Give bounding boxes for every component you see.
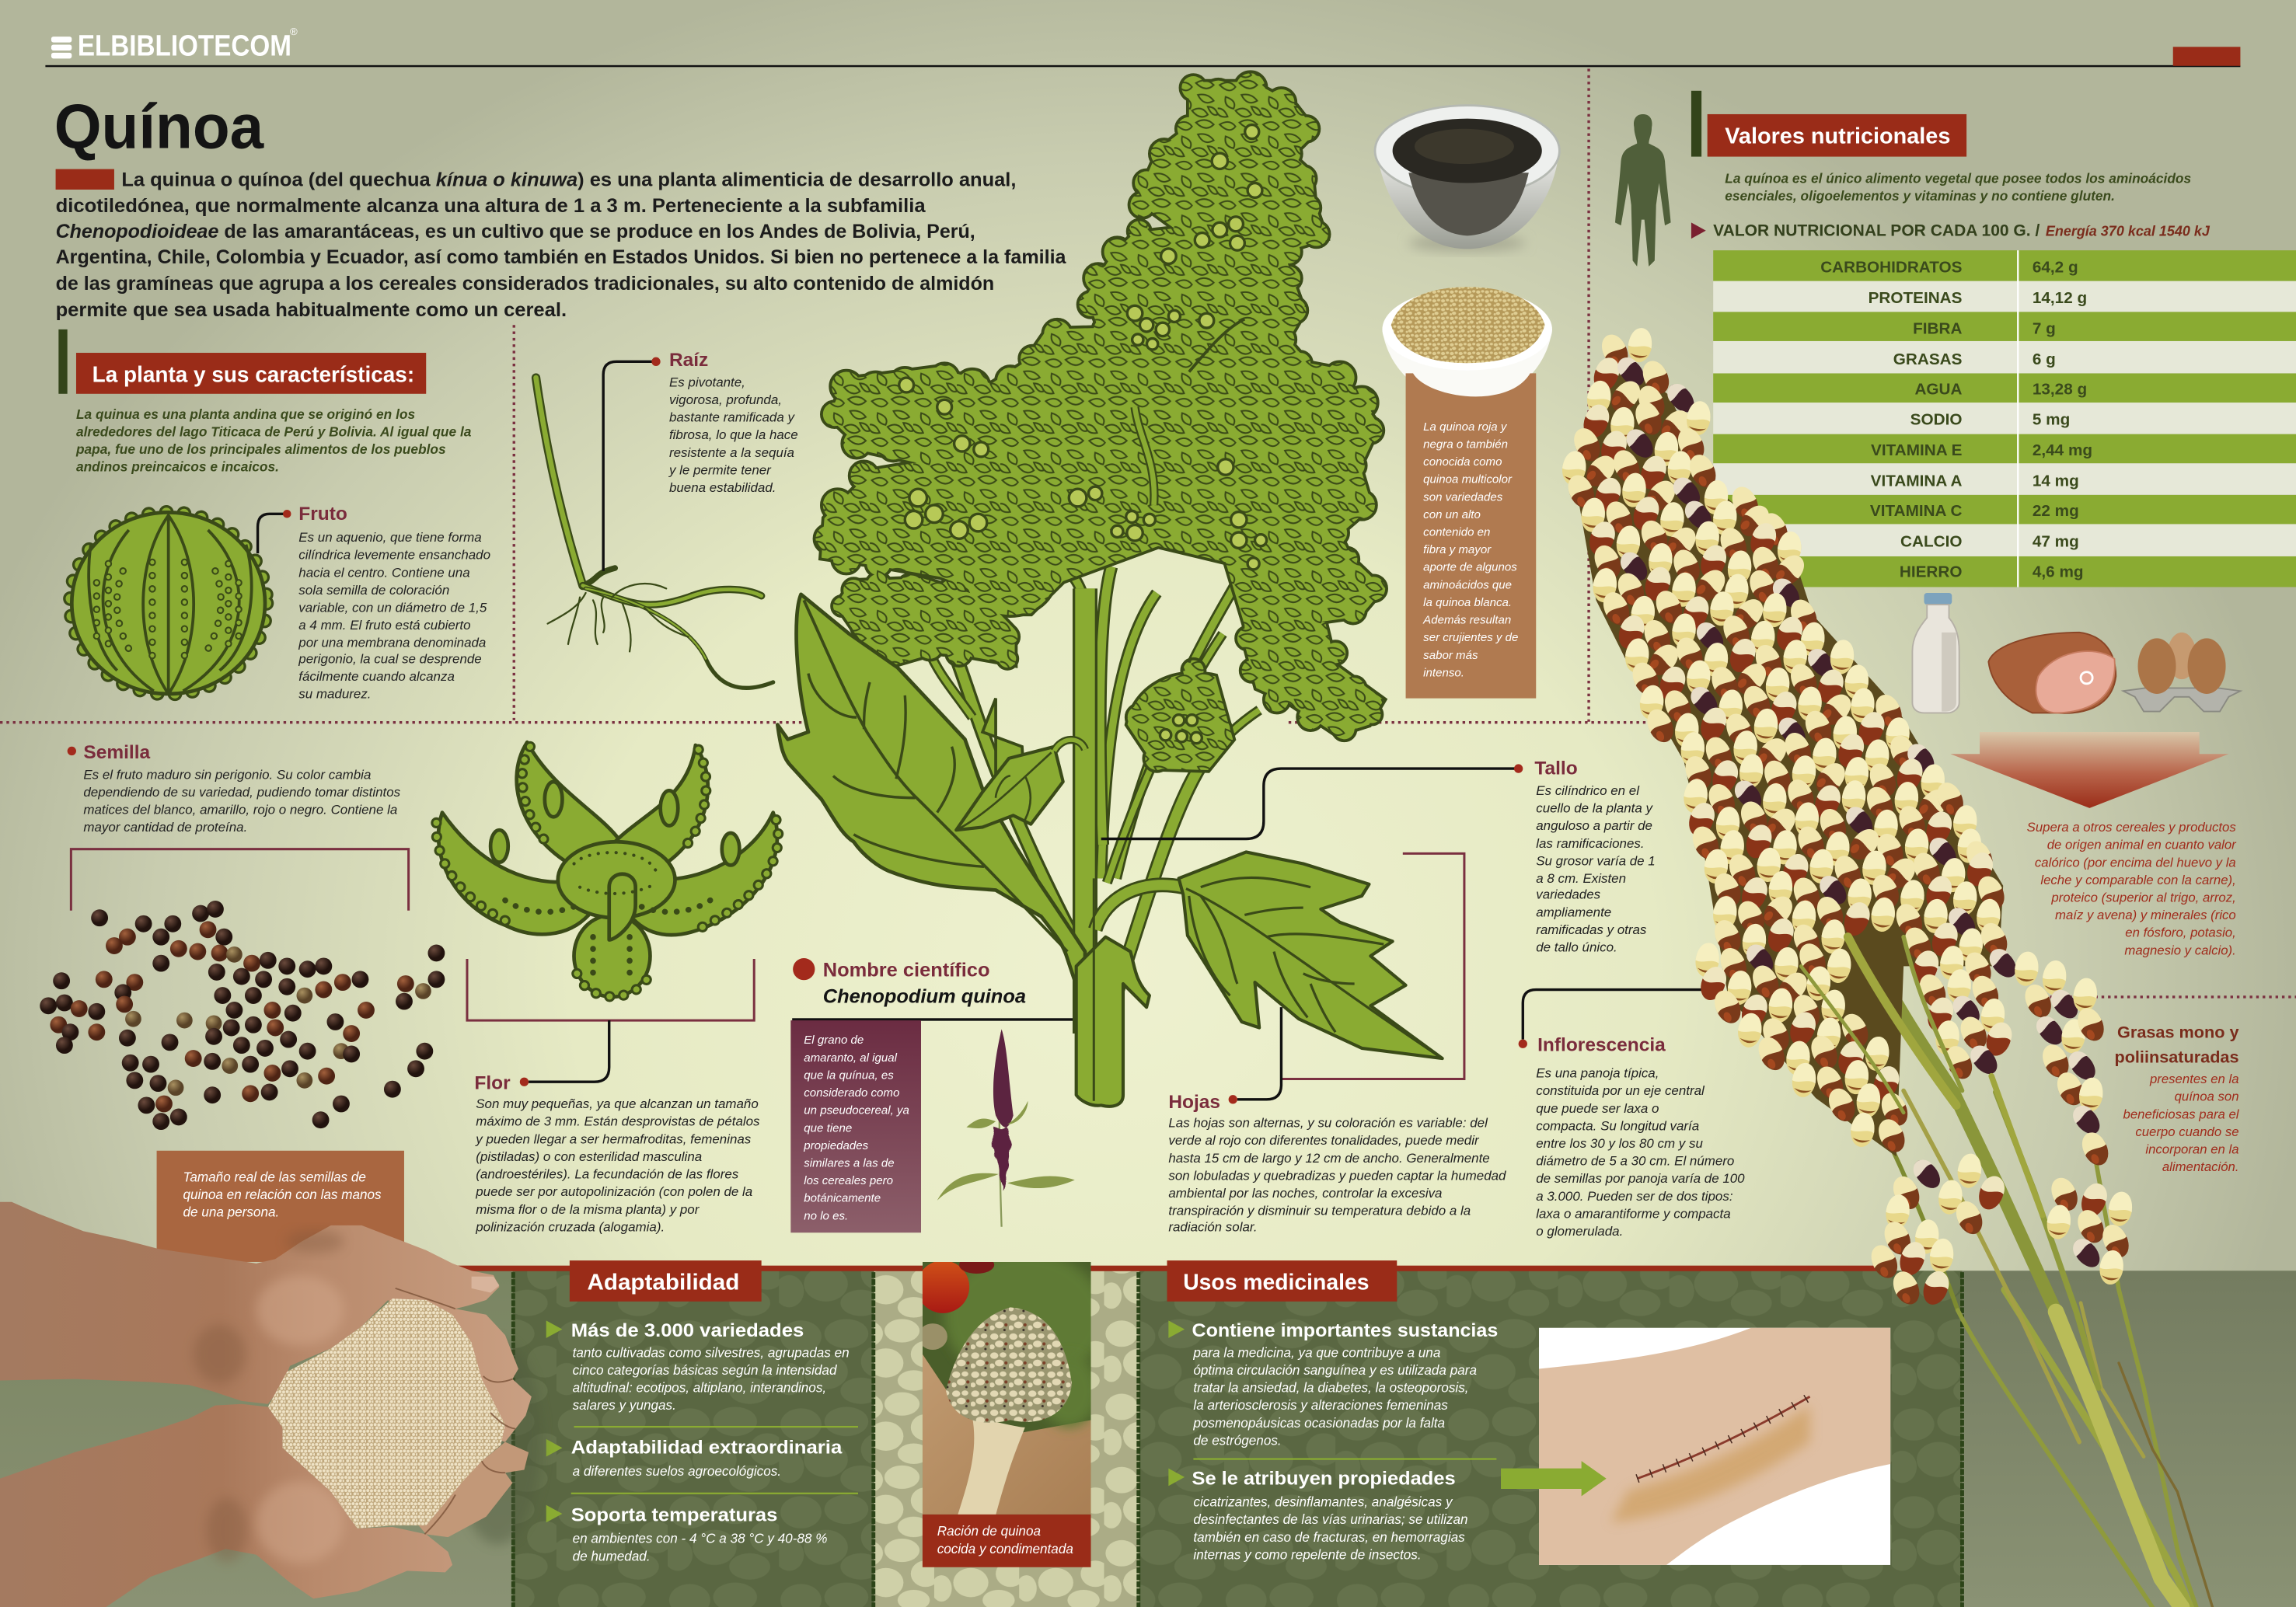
- food caption: cocida y condimentada: [937, 1541, 1073, 1556]
- nutrition table: VITAMINA E: [1871, 441, 1963, 459]
- inflorescencia label: compacta. Su longitud varía: [1536, 1118, 1699, 1133]
- panel: nombre cientifico: amaranto, al igual: [804, 1051, 898, 1065]
- dotted dividers: [0, 69, 2296, 997]
- panicle stems: [1757, 932, 2213, 1607]
- hojas bracket: [1281, 853, 1464, 1079]
- panel: bottom band left: [0, 1271, 512, 1607]
- tallo label: [1514, 758, 1656, 955]
- panel: usos medicinales: de estrógenos.: [1193, 1432, 1282, 1448]
- table heading: [1691, 221, 2210, 239]
- panel: adaptabilidad: Más de 3.000 variedades: [571, 1321, 804, 1341]
- header rule and red tab: [45, 47, 2240, 67]
- raíz label: vigorosa, profunda,: [669, 392, 782, 407]
- fruto label: [258, 504, 490, 702]
- panel: usos medicinales: óptima circulación sanguínea y es utilizada para: [1193, 1362, 1477, 1378]
- flor label: [474, 1020, 760, 1234]
- fruto label: cilíndrica levemente ensanchado: [298, 548, 490, 563]
- hojas label: Hojas: [1168, 1092, 1220, 1113]
- icon: flor illustration: [436, 742, 778, 997]
- panel: usos medicinales: también en caso de fracturas, en hemorragias: [1193, 1529, 1465, 1545]
- fruto label: Fruto: [298, 504, 347, 525]
- hojas label: verde al rojo con diferentes tonalidades, puede medir: [1168, 1133, 1480, 1148]
- comparison text: proteico (superior al trigo, arroz,: [2050, 891, 2236, 905]
- inflorescencia label: de semillas por panoja varía de 100: [1536, 1171, 1745, 1186]
- nutrition table: 14 mg: [2033, 472, 2079, 490]
- panel: nombre cientifico: Nombre científico: [823, 960, 989, 981]
- orange info box: con un alto: [1423, 508, 1481, 521]
- raíz label: Es pivotante,: [669, 375, 745, 389]
- panel: adaptabilidad: Adaptabilidad extraordinaria: [571, 1438, 843, 1459]
- nutrition table: SODIO: [1910, 410, 1962, 428]
- nutrition table: HIERRO: [1900, 563, 1962, 580]
- icon: amaranto plant: [937, 1029, 1075, 1227]
- flor label: polinización cruzada (alogamia).: [475, 1219, 665, 1234]
- comparison text: leche y comparable con la carne),: [2040, 873, 2236, 887]
- hojas label: transpiración y disminuir su temperatura debido a la: [1168, 1204, 1471, 1218]
- orange info box: quinoa multicolor: [1423, 473, 1513, 486]
- panel: valores nutricionales header: [1691, 91, 1966, 157]
- food photo: [922, 1262, 1091, 1515]
- la planta intro: andinos preincaicos e incaicos.: [76, 459, 279, 475]
- plant inner stems: [1135, 319, 1244, 505]
- icon: ham: [1988, 633, 2116, 713]
- fruto label: por una membrana denominada: [298, 636, 486, 650]
- nutrition table: 22 mg: [2033, 502, 2079, 520]
- orange info box: Además resultan: [1422, 614, 1511, 627]
- inflorescencia label: diámetro de 5 a 30 cm. El número: [1536, 1154, 1734, 1169]
- semilla label: dependiendo de su variedad, pudiendo tomar distintos: [83, 785, 401, 800]
- icon: fruto illustration: [70, 512, 267, 694]
- hands photo: [0, 1202, 542, 1607]
- inflorescencia label: [1519, 990, 1745, 1239]
- orange info box: intenso.: [1423, 666, 1464, 679]
- grasas text: poliinsaturadas: [2114, 1048, 2239, 1067]
- intro text: de las gramíneas que agrupa a los cereales considerados tradicionales, su alto contenido de almidón: [56, 273, 994, 295]
- inflorescencia label: Inflorescencia: [1537, 1035, 1666, 1056]
- hojas label: radiación solar.: [1168, 1219, 1258, 1234]
- nutrition table: 14,12 g: [2033, 289, 2087, 307]
- panel: adaptabilidad: tanto cultivadas como silvestres, agrupadas en: [573, 1344, 850, 1360]
- table heading: VALOR NUTRICIONAL POR CADA 100 G. /: [1713, 221, 2040, 239]
- icon: raíz illustration: [536, 378, 773, 688]
- nutrition table: PROTEINAS: [1869, 289, 1963, 307]
- semilla label: Es el fruto maduro sin perigonio. Su color cambia: [83, 767, 371, 782]
- raíz label: bastante ramificada y: [669, 410, 795, 425]
- grasas text: alimentación.: [2162, 1159, 2239, 1174]
- grasas text: [2114, 1023, 2240, 1174]
- hojas label: hasta 15 cm de largo y 12 cm de ancho. Generalmente: [1168, 1151, 1490, 1166]
- intro text: Argentina, Chile, Colombia y Ecuador, así como también en Estados Unidos. Si bien no pertenece a la familia: [56, 246, 1066, 268]
- nutrition table: GRASAS: [1893, 350, 1963, 368]
- nutrition table: 4,6 mg: [2033, 563, 2084, 580]
- panel: adaptabilidad: en ambientes con - 4 °C a 38 °C y 40-88 %: [573, 1531, 827, 1546]
- tallo label: las ramificaciones.: [1536, 836, 1645, 851]
- tallo label: a 8 cm. Existen: [1536, 871, 1626, 886]
- panel: adaptabilidad: Adaptabilidad: [587, 1270, 739, 1295]
- panel: nombre cientifico: no lo es.: [804, 1209, 848, 1222]
- panel: food column background: [874, 1271, 1139, 1607]
- orange info box: [1406, 373, 1536, 699]
- semilla bracket: [71, 849, 409, 911]
- nutrition table: 6 g: [2033, 350, 2056, 368]
- intro text: [56, 169, 1066, 321]
- plant panicle clusters: [815, 73, 1385, 770]
- nutrition table: VITAMINA C: [1870, 502, 1963, 520]
- valores intro: esenciales, oligoelementos y vitaminas y no contiene gluten.: [1725, 188, 2115, 204]
- orange info box: fibra y mayor: [1423, 543, 1492, 556]
- nutrition table: 2,44 mg: [2033, 441, 2092, 459]
- seeds caption box: quinoa en relación con las manos: [183, 1187, 382, 1202]
- tallo label: ramificadas y otras: [1536, 922, 1647, 937]
- grasas text: Grasas mono y: [2117, 1023, 2239, 1042]
- semilla label: [68, 742, 401, 835]
- hojas label: Las hojas son alternas, y su coloración es variable: del: [1168, 1116, 1488, 1131]
- raíz label: buena estabilidad.: [669, 480, 776, 495]
- panel: adaptabilidad: altitudinal: ecotipos, altiplano, interandinos,: [573, 1380, 826, 1396]
- small leaf: [956, 740, 1085, 830]
- orange info box: sabor más: [1423, 649, 1478, 662]
- panel: usos medicinales: tratar la ansiedad, la diabetes, la osteoporosis,: [1193, 1380, 1469, 1396]
- panicle grains photo: [1560, 326, 2134, 1309]
- orange info box: aminoácidos que: [1423, 578, 1512, 591]
- fruto label: su madurez.: [298, 687, 372, 702]
- panel: adaptabilidad: Soporta temperaturas: [571, 1505, 777, 1525]
- panel: adaptabilidad background: [512, 1271, 874, 1607]
- nutrition table: 47 mg: [2033, 533, 2079, 551]
- seeds photo: [40, 901, 445, 1130]
- orange info box: negra o también: [1423, 437, 1508, 451]
- grasas text: presentes en la: [2149, 1072, 2239, 1086]
- comparison text: Supera a otros cereales y productos: [2027, 820, 2236, 835]
- panel: adaptabilidad: cinco categorías básicas según la intensidad: [573, 1362, 837, 1378]
- comparison text: de origen animal en cuanto valor: [2047, 838, 2237, 852]
- raíz label: fibrosa, lo que la hace: [669, 427, 798, 442]
- flor label: Flor: [474, 1073, 511, 1094]
- panel: valores nutricionales header: Valores nutricionales: [1725, 124, 1950, 148]
- nutrition table: 13,28 g: [2033, 381, 2087, 399]
- intro text: Chenopodioideae de las amarantáceas, es un cultivo que se produce en los Andes de Bolivia, Perú,: [56, 221, 975, 242]
- tallo connector: [1101, 769, 1516, 838]
- panel: usos medicinales: la arteriosclerosis y alteraciones femeninas: [1193, 1397, 1448, 1413]
- la planta intro: alrededores del lago Titicaca de Perú y Bolivia. Al igual que la: [76, 424, 472, 439]
- icon: milk bottle: [1912, 593, 1959, 713]
- big left leaf: [777, 594, 1085, 1012]
- raíz label: y le permite tener: [668, 462, 772, 477]
- orange info box: la quinoa blanca.: [1423, 596, 1512, 609]
- fruto label: hacia el centro. Contiene una: [298, 565, 470, 580]
- panel: nombre cientifico: [790, 958, 1078, 1232]
- nutrition table: [1713, 250, 2296, 587]
- fruto label: fácilmente cuando alcanza: [298, 669, 455, 684]
- orange info box: aporte de algunos: [1423, 561, 1517, 574]
- inflorescencia label: laxa o amarantiforme y compacta: [1536, 1206, 1731, 1221]
- panel: nombre cientifico: botánicamente: [804, 1192, 881, 1205]
- panel: nombre cientifico: un pseudocereal, ya: [804, 1104, 909, 1117]
- raíz label: [603, 350, 798, 571]
- flor label: misma flor o de la misma planta) y por: [476, 1202, 700, 1217]
- intro text: La quinua o quínoa (del quechua kínua o kinuwa ) es una planta alimenticia de desarrollo anual,: [121, 169, 1016, 190]
- white bowl photo: [1382, 287, 1552, 403]
- orange info box: son variedades: [1423, 490, 1503, 504]
- la planta intro: La quinua es una planta andina que se originó en los: [76, 406, 415, 422]
- inflorescencia label: constituida por un eje central: [1536, 1083, 1705, 1098]
- nutrition table: AGUA: [1914, 381, 1962, 399]
- la planta intro: papa, fue uno de los principales alimentos de los pueblos: [75, 441, 446, 457]
- grasas text: cuerpo cuando se: [2135, 1124, 2239, 1139]
- semilla label: Semilla: [83, 742, 151, 763]
- panel: la planta header: La planta y sus características:: [92, 362, 414, 387]
- fruto label: Es un aquenio, que tiene forma: [298, 530, 482, 545]
- flor label: puede ser por autopolinización (con polen de la: [475, 1184, 752, 1199]
- logo: ®: [290, 26, 298, 37]
- hojas label: [1168, 1007, 1506, 1234]
- panel: adaptabilidad: de humedad.: [573, 1548, 651, 1563]
- tallo label: anguloso a partir de: [1536, 818, 1652, 833]
- panel: usos medicinales: internas y como repelente de insectos.: [1193, 1546, 1422, 1562]
- fruto label: perigonio, la cual se desprende: [298, 651, 482, 666]
- panel: usos medicinales: cicatrizantes, desinflamantes, analgésicas y: [1193, 1494, 1453, 1510]
- seeds caption box: Tamaño real de las semillas de: [183, 1169, 366, 1184]
- right leaf: [1095, 852, 1443, 1058]
- food caption: [923, 1515, 1091, 1567]
- flor label: (pistiladas) o con esterilidad masculina: [476, 1149, 702, 1164]
- panel: nombre cientifico: considerado como: [804, 1086, 899, 1100]
- hojas label: son lobuladas y quebradizas y pueden captar la humedad: [1168, 1168, 1506, 1183]
- panel: la planta header: [58, 329, 426, 394]
- comparison text: magnesio y calcio).: [2124, 943, 2236, 957]
- valores intro: La quínoa es el único alimento vegetal que posee todos los aminoácidos: [1725, 170, 2192, 186]
- grasas text: incorporan en la: [2145, 1142, 2239, 1157]
- panel: nombre cientifico: Chenopodium quinoa: [823, 985, 1026, 1007]
- panel: adaptabilidad: salares y yungas.: [573, 1397, 676, 1413]
- icon: human silhouette: [1615, 114, 1671, 267]
- nutrition table: VITAMINA A: [1871, 472, 1962, 490]
- food caption: Ración de quinoa: [937, 1523, 1041, 1539]
- panel: usos medicinales: desinfectantes de las vías urinarias; se utilizan: [1193, 1511, 1468, 1527]
- orange info box: conocida como: [1423, 455, 1502, 469]
- fruto label: a 4 mm. El fruto está cubierto: [298, 618, 471, 633]
- tallo label: ampliamente: [1536, 905, 1611, 919]
- panel: nombre cientifico: que la quínua, es: [804, 1068, 894, 1082]
- panel: nombre cientifico: El grano de: [804, 1034, 864, 1047]
- plant flower buds: [899, 125, 1267, 744]
- flor label: máximo de 3 mm. Están desprovistas de pétalos: [476, 1114, 760, 1129]
- raíz label: resistente a la sequía: [669, 445, 794, 460]
- panel: adaptabilidad: [546, 1260, 858, 1563]
- nutrition table: CALCIO: [1900, 533, 1962, 551]
- panicle stem highlights: [1801, 937, 2043, 1215]
- tallo label: Su grosor varía de 1: [1536, 853, 1656, 868]
- logo: ELBIBLIOTECOM: [78, 30, 291, 62]
- panel: usos medicinales: para la medicina, ya que contribuye a una: [1192, 1344, 1440, 1360]
- panel: nombre cientifico: que tiene: [804, 1121, 852, 1135]
- inflorescencia label: que puede ser laxa o: [1536, 1101, 1659, 1116]
- nutrition table: FIBRA: [1913, 320, 1962, 338]
- icon: eggs: [2123, 633, 2240, 712]
- hojas label: ambiental por las noches, controlar la excesiva: [1168, 1186, 1442, 1201]
- panel: usos medicinales: Usos medicinales: [1183, 1270, 1369, 1295]
- tallo label: Tallo: [1534, 758, 1578, 779]
- panel: usos medicinales: posmenopáusicas ocasionadas por la falta: [1192, 1415, 1445, 1431]
- panel: usos medicinales: Contiene importantes sustancias: [1192, 1321, 1498, 1341]
- panel: nombre cientifico: similares a las de: [804, 1156, 895, 1170]
- comparison text: maíz y avena) y minerales (rico: [2055, 908, 2236, 922]
- panel: nombre cientifico: los cereales pero: [804, 1174, 893, 1187]
- flor label: Son muy pequeñas, ya que alcanzan un tamaño: [476, 1096, 759, 1111]
- tallo label: variedades: [1536, 887, 1601, 902]
- flor label: y pueden llegar a ser hermafroditas, femeninas: [475, 1131, 752, 1146]
- panel: usos medicinales: Se le atribuyen propiedades: [1192, 1469, 1456, 1489]
- glass bowl photo: [1375, 106, 1559, 252]
- panel: usos medicinales: [1167, 1260, 1498, 1562]
- panel: bottom right flat: [1962, 1271, 2296, 1607]
- orange info box: ser crujientes y de: [1423, 631, 1518, 644]
- fruto label: variable, con un diámetro de 1,5: [298, 600, 487, 615]
- inflorescencia label: Es una panoja típica,: [1536, 1066, 1659, 1081]
- arrow: comparison down arrow: [1950, 732, 2228, 808]
- comparison text: en fósforo, potasio,: [2125, 926, 2236, 940]
- stalk base: [1076, 878, 1150, 1107]
- comparison text: calórico (por encima del huevo y la: [2035, 855, 2236, 870]
- orange info box: La quinoa roja y: [1423, 420, 1508, 434]
- seeds caption box: [157, 1151, 404, 1262]
- tallo label: de tallo único.: [1536, 940, 1617, 955]
- wound photo: [1539, 1328, 1890, 1565]
- inflorescencia label: o glomerulada.: [1536, 1224, 1623, 1239]
- panel: usos medicinales background: [1139, 1271, 1962, 1607]
- intro text: dicotiledónea, que normalmente alcanza una altura de 1 a 3 m. Perteneciente a la subfamilia: [56, 195, 926, 217]
- table heading: Energía 370 kcal 1540 kJ: [2046, 222, 2210, 239]
- plant stems: [928, 563, 1259, 1034]
- red band line: [455, 1266, 1879, 1271]
- flor label: (androestériles). La fecundación de las flores: [476, 1167, 739, 1182]
- raíz label: Raíz: [669, 350, 708, 371]
- nutrition table: 5 mg: [2033, 410, 2070, 428]
- grasas text: quínoa son: [2175, 1089, 2239, 1104]
- band dividers: [513, 1272, 1962, 1607]
- flor bracket: [467, 959, 754, 1020]
- arrow: green arrow to wound: [1501, 1461, 1607, 1496]
- orange info box: contenido en: [1423, 526, 1490, 539]
- panel: adaptabilidad: a diferentes suelos agroecológicos.: [573, 1463, 781, 1479]
- fruto label: sola semilla de coloración: [298, 583, 449, 598]
- panel: nombre cientifico: propiedades: [803, 1139, 869, 1152]
- intro text: permite que sea usada habitualmente como un cereal.: [56, 299, 567, 321]
- semilla label: matices del blanco, amarillo, rojo o negro. Contiene la: [83, 802, 397, 817]
- nutrition table: 7 g: [2033, 320, 2056, 338]
- seeds caption box: de una persona.: [183, 1204, 279, 1220]
- inflorescencia label: entre los 30 y los 80 cm y su: [1536, 1136, 1703, 1151]
- semilla label: mayor cantidad de proteína.: [83, 820, 247, 835]
- nutrition table: 64,2 g: [2033, 258, 2078, 276]
- title: Quínoa: [54, 92, 264, 162]
- grasas text: beneficiosas para el: [2123, 1107, 2240, 1121]
- inflorescencia label: a 3.000. Pueden ser de dos tipos:: [1536, 1189, 1733, 1204]
- tallo label: cuello de la planta y: [1536, 801, 1653, 816]
- nutrition table: CARBOHIDRATOS: [1820, 258, 1963, 276]
- tallo label: Es cilíndrico en el: [1536, 783, 1640, 798]
